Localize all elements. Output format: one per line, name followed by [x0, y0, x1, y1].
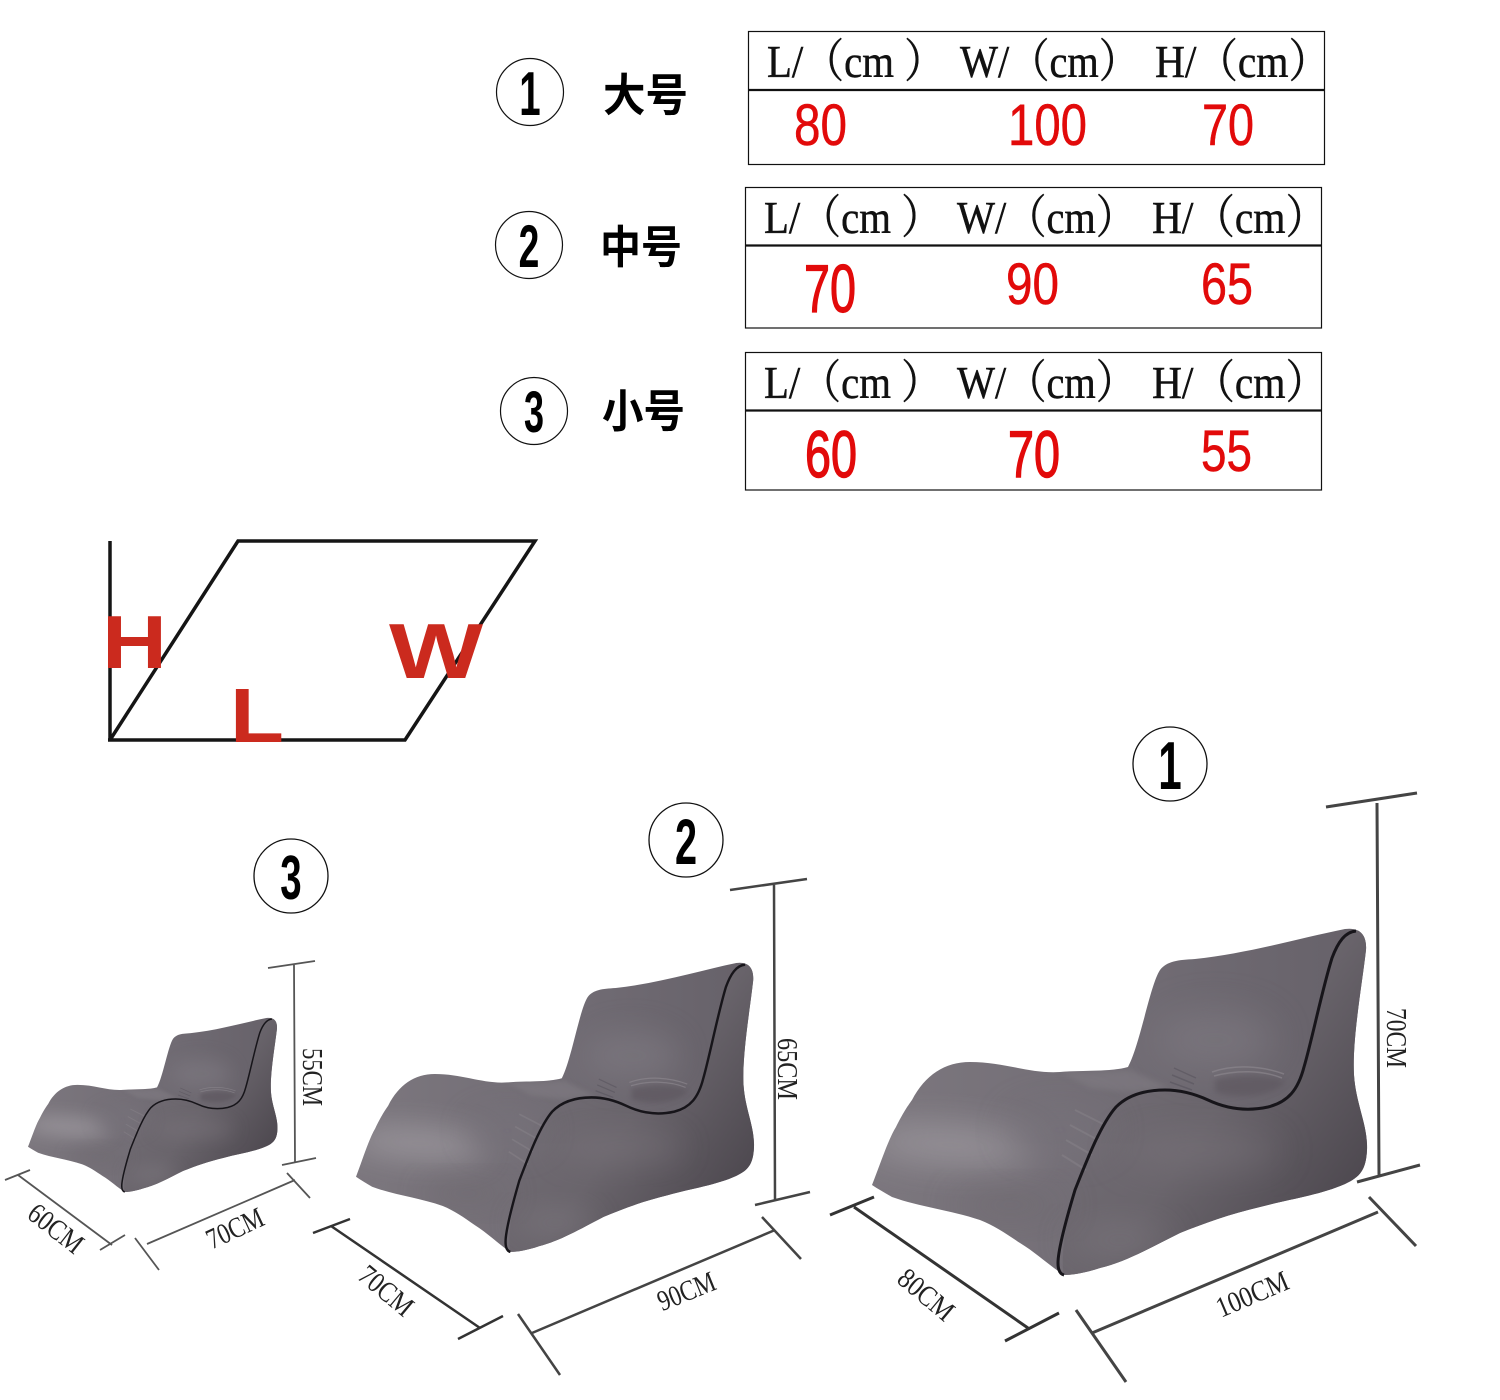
lounger illustration: [24, 1016, 284, 1195]
badge 2: [496, 212, 562, 280]
lounger illustration: [349, 960, 764, 1256]
table: large dimensions: L/（cm ）: [767, 36, 945, 87]
label: medium: 中号: [600, 222, 682, 273]
table: large dimensions: [748, 32, 1330, 164]
height dimension 70CM: [1326, 793, 1420, 1182]
label: small: 小号: [602, 386, 685, 437]
table: small dimensions: [745, 352, 1327, 491]
length dimension 60CM: [5, 1170, 125, 1261]
table: medium dimensions: H/（cm）: [1152, 192, 1327, 243]
size row 1: [496, 32, 1330, 164]
length dimension 80CM: [830, 1197, 1059, 1341]
badge 1: [496, 58, 564, 128]
width dimension 90CM: 90CM: [653, 1266, 720, 1318]
width dimension 70CM: 70CM: [201, 1202, 269, 1256]
number badge 1: 1: [1158, 728, 1182, 803]
table: small dimensions: 60: [805, 417, 857, 491]
table: small dimensions: L/（cm ）: [764, 357, 942, 408]
chair 3: small: [5, 839, 328, 1270]
table: medium dimensions: 70: [804, 251, 856, 327]
diagram: L W H parallelogram: W: [389, 607, 483, 695]
badge 3: [500, 378, 568, 445]
diagram: L W H parallelogram: H: [102, 600, 167, 684]
chair 1: large: [830, 727, 1420, 1382]
height dimension 65CM: [730, 879, 810, 1205]
height dimension 70CM: 70CM: [1380, 1008, 1412, 1068]
table: large dimensions: 80: [794, 93, 847, 158]
number badge 3: [254, 839, 328, 913]
length dimension 80CM: 80CM: [891, 1262, 961, 1328]
length dimension 70CM: 70CM: [352, 1259, 420, 1323]
diagram: L W H parallelogram: L: [230, 673, 284, 759]
width dimension 100CM: 100CM: [1211, 1265, 1294, 1324]
number badge 3: 3: [280, 843, 302, 912]
height dimension 55CM: 55CM: [296, 1048, 328, 1106]
table: large dimensions: 70: [1202, 93, 1254, 158]
number badge 2: [649, 803, 723, 878]
number badge 2: 2: [675, 808, 697, 878]
table: large dimensions: 100: [1008, 93, 1087, 158]
diagram: L W H parallelogram: [102, 541, 535, 759]
label: large: 大号: [603, 70, 688, 121]
lounger illustration: [864, 925, 1380, 1280]
table: small dimensions: H/（cm）: [1152, 357, 1327, 408]
table: medium dimensions: 65: [1201, 252, 1253, 317]
table: large dimensions: H/（cm）: [1155, 36, 1330, 87]
table: medium dimensions: 90: [1006, 252, 1059, 317]
badge 3: 3: [524, 380, 544, 445]
width dimension 70CM: [135, 1173, 310, 1270]
height dimension 65CM: 65CM: [771, 1038, 803, 1100]
chair 2: medium: [313, 803, 810, 1375]
table: medium dimensions: W/（cm）: [957, 192, 1136, 243]
table: medium dimensions: L/（cm ）: [764, 192, 942, 243]
badge 1: 1: [519, 59, 541, 128]
size row 2: [496, 188, 1327, 328]
size row 3: [500, 352, 1327, 491]
badge 2: 2: [519, 213, 539, 280]
table: small dimensions: 70: [1008, 417, 1060, 491]
length dimension 70CM: [313, 1219, 503, 1339]
table: medium dimensions: [745, 188, 1327, 328]
number badge 1: [1133, 727, 1207, 803]
length dimension 60CM: 60CM: [21, 1197, 90, 1261]
table: large dimensions: W/（cm）: [960, 36, 1139, 87]
height dimension 55CM: [268, 961, 328, 1165]
width dimension 90CM: [518, 1217, 801, 1375]
table: small dimensions: W/（cm）: [957, 357, 1136, 408]
width dimension 100CM: [1076, 1197, 1416, 1382]
table: small dimensions: 55: [1201, 419, 1252, 484]
